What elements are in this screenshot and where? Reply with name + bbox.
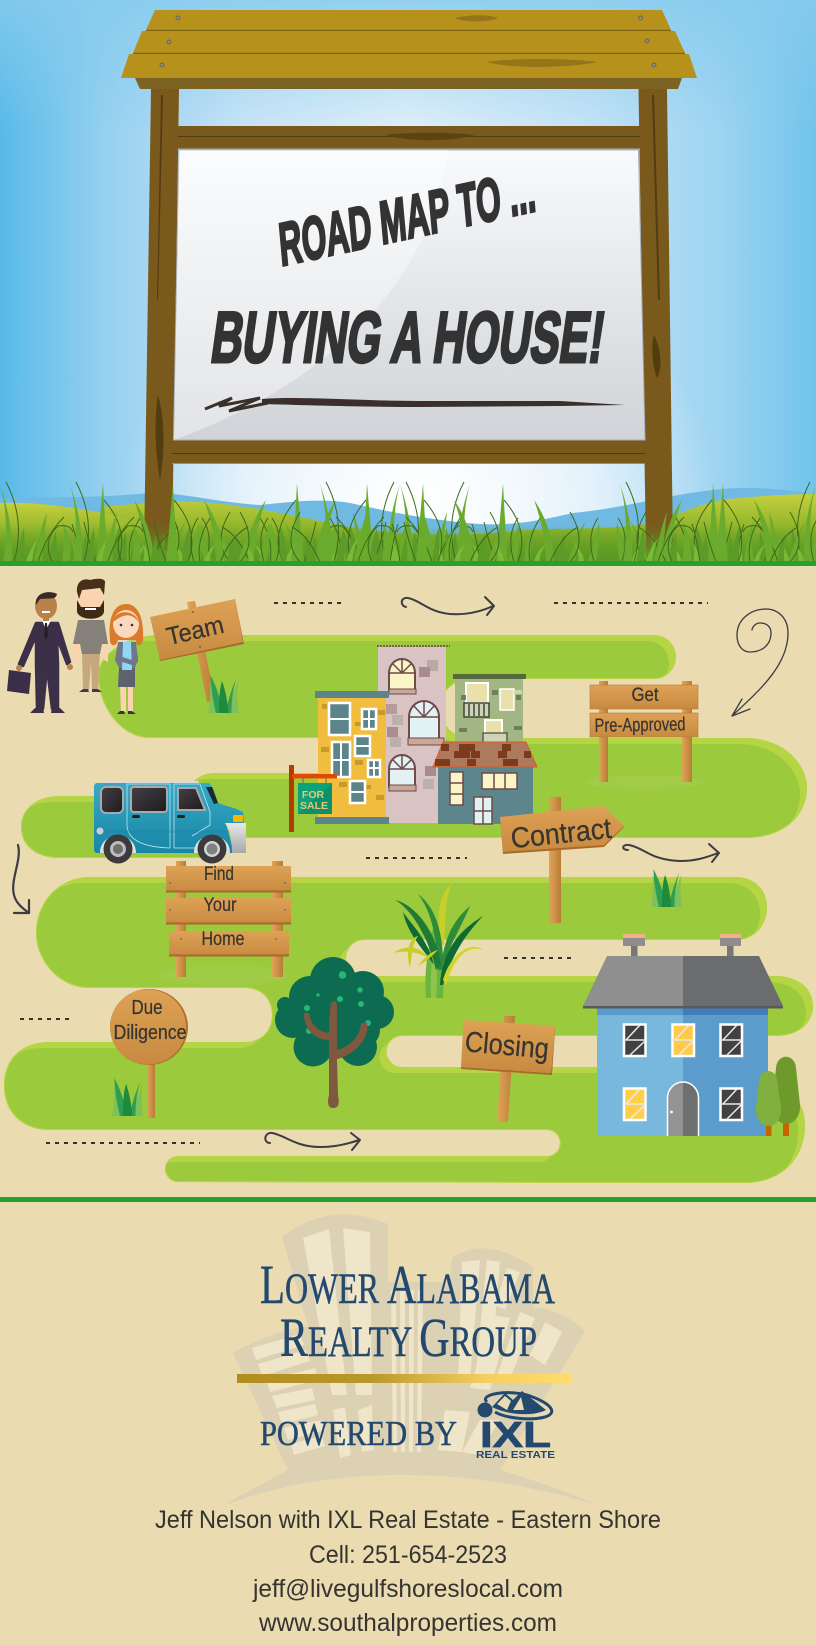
green hills bbox=[0, 494, 816, 562]
nails bbox=[160, 16, 656, 67]
contact details: Cell: 251-654-2523 bbox=[309, 1541, 507, 1569]
sign: Get Pre-Approved: Get bbox=[632, 685, 659, 706]
distant blue hills bbox=[0, 488, 816, 545]
brush underline bbox=[205, 398, 625, 411]
bearded man bbox=[73, 579, 108, 692]
watermark skyline bbox=[222, 1215, 600, 1506]
woman bbox=[110, 604, 143, 714]
windows bbox=[624, 1024, 742, 1120]
sign: Team bbox=[150, 599, 244, 702]
sign: Get Pre-Approved: Pre-Approved bbox=[594, 714, 686, 737]
company name: REALTY GROUP bbox=[280, 1307, 537, 1368]
door bbox=[668, 1082, 698, 1136]
company name: LOWER ALABAMA bbox=[260, 1254, 555, 1315]
logo: IXL Real Estate bbox=[476, 1391, 555, 1461]
for sale sign bbox=[289, 765, 337, 832]
sign: Closing bbox=[461, 1016, 555, 1122]
chimneys bbox=[623, 934, 741, 957]
upper cross bar bbox=[178, 126, 640, 150]
roof of the sign bbox=[121, 10, 697, 89]
gold bar bbox=[237, 1374, 571, 1383]
arrow: left down bbox=[13, 845, 29, 913]
sign: Find Your Home bbox=[160, 861, 291, 985]
logo: IXL Real Estate: REAL ESTATE bbox=[476, 1450, 555, 1461]
arrow: spiral bbox=[732, 609, 788, 716]
trees beside house bbox=[756, 1057, 800, 1136]
logo: IXL Real Estate: IXL bbox=[480, 1414, 551, 1455]
white sign panel bbox=[174, 150, 645, 440]
sign: Due Diligence bbox=[110, 989, 188, 1118]
lower cross bar bbox=[172, 440, 645, 464]
company name bbox=[260, 1254, 555, 1368]
pink building bbox=[377, 646, 450, 823]
blue house with tiled roof bbox=[433, 742, 537, 824]
arrow: contract squiggle bbox=[623, 844, 719, 862]
for sale sign: SALE bbox=[300, 800, 328, 812]
arrows bbox=[13, 597, 788, 1150]
icon: grass tuft by Due Diligence sign bbox=[112, 1078, 143, 1116]
sign: Team: Team bbox=[164, 611, 227, 651]
foreground grass bbox=[0, 482, 816, 562]
title line 1: ROAD MAP TO ... bbox=[276, 156, 538, 279]
row of colourful houses bbox=[289, 646, 537, 832]
sign: Closing: Closing bbox=[464, 1026, 550, 1066]
sign: Due Diligence: Due bbox=[132, 997, 162, 1019]
green divider bottom bbox=[0, 1197, 816, 1202]
icon: grass tuft by Team sign bbox=[208, 675, 239, 713]
sign: Find Your Home: Your bbox=[204, 895, 237, 916]
sign: Find Your Home: Find bbox=[204, 864, 234, 885]
contact details: jeff@livegulfshoreslocal.com bbox=[252, 1575, 563, 1603]
sky bbox=[0, 0, 816, 562]
header: sign in a sunny meadow bbox=[0, 0, 816, 562]
sign: Due Diligence: Diligence bbox=[114, 1022, 186, 1044]
tree bbox=[275, 957, 394, 1108]
powered by: POWERED BY bbox=[260, 1414, 457, 1453]
roof bbox=[583, 956, 783, 1008]
man in suit bbox=[7, 592, 73, 713]
icon: grass tuft by Contract sign bbox=[651, 869, 682, 907]
right post bbox=[638, 89, 673, 551]
green building bbox=[453, 674, 526, 744]
winding road bbox=[0, 635, 813, 1189]
contact details bbox=[155, 1506, 661, 1637]
team of people bbox=[7, 579, 143, 714]
briefcase bbox=[7, 670, 31, 694]
sign: Find Your Home: Home bbox=[202, 929, 244, 950]
sign: Contract arrow bbox=[500, 797, 624, 923]
contact details: Jeff Nelson with IXL Real Estate - Eastern Shore bbox=[155, 1506, 661, 1534]
contact details: www.southalproperties.com bbox=[258, 1609, 557, 1637]
sign: Contract arrow: Contract bbox=[509, 813, 613, 855]
dotted lines bbox=[20, 603, 708, 1143]
destination blue house bbox=[583, 934, 800, 1136]
yellow building bbox=[315, 691, 389, 824]
big plant bbox=[393, 883, 483, 998]
for sale sign: FOR bbox=[302, 789, 324, 801]
van bbox=[94, 781, 246, 864]
arrow: bottom squiggle bbox=[265, 1133, 360, 1150]
green divider top bbox=[0, 561, 816, 566]
sign: Get Pre-Approved bbox=[585, 681, 705, 789]
left post bbox=[144, 89, 179, 551]
wheels bbox=[100, 834, 230, 864]
arrow: top squiggle bbox=[402, 597, 494, 615]
